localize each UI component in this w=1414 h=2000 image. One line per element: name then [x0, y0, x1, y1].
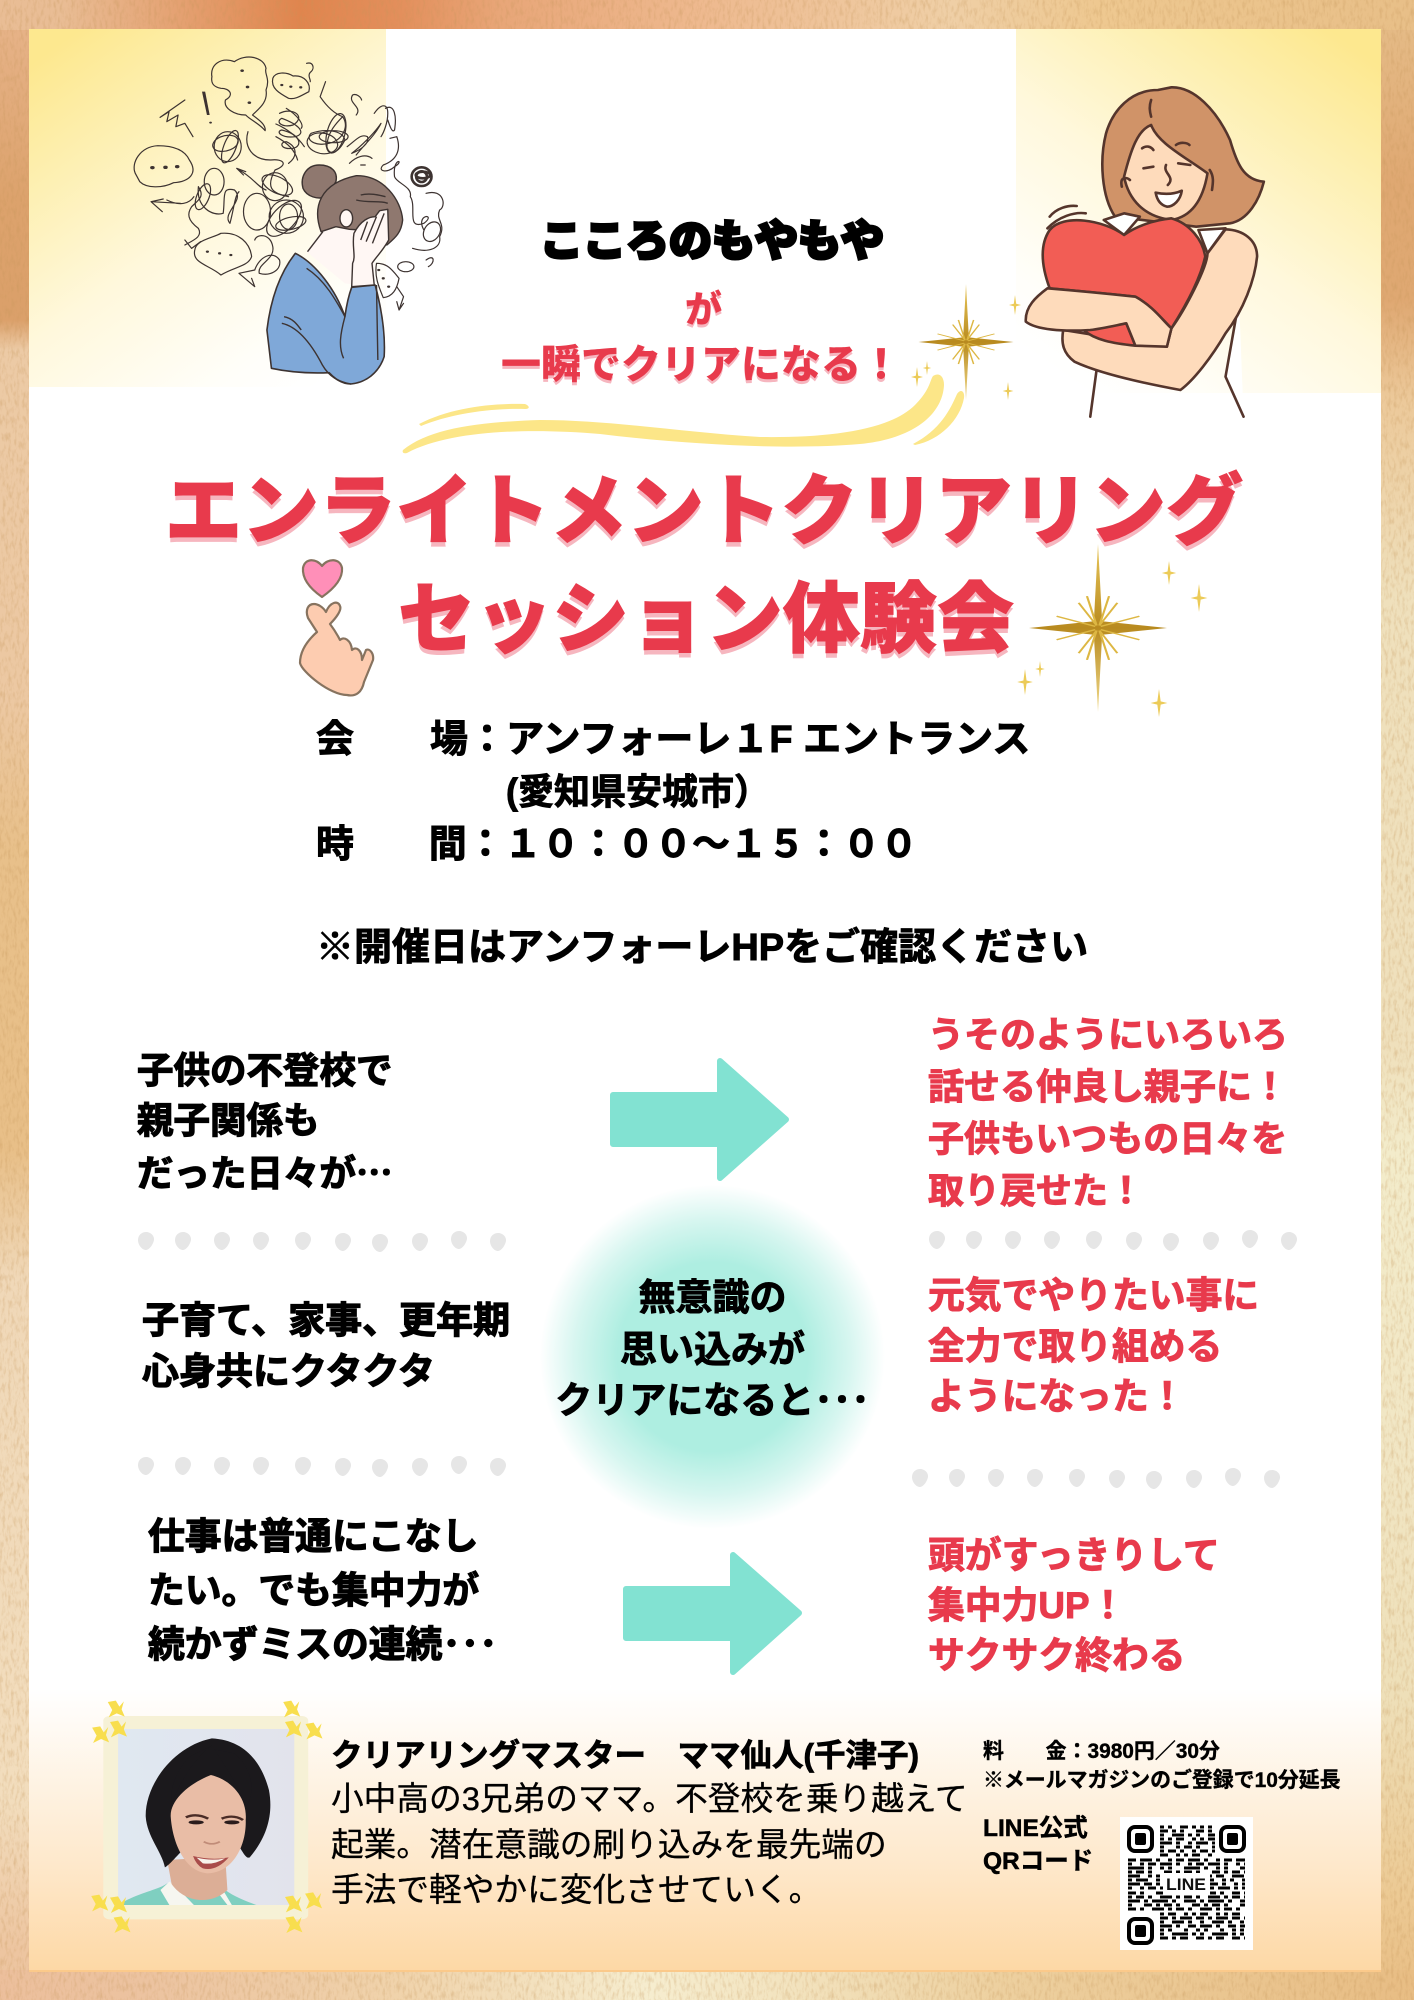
glowing circle with message — [540, 1185, 885, 1529]
subtitle: kokoro no moyamoya: こころのもやもや — [540, 218, 884, 266]
title line 1: エンライトメントクリアリング — [165, 469, 1243, 555]
profile heading: クリアリングマスター ママ仙人(千津子) — [331, 1737, 919, 1773]
QR code: LINE — [1166, 1875, 1206, 1894]
title line 2: セッション体験会 — [398, 577, 1014, 663]
after: focus up: 頭がすっきりして 集中力UP！ サクサク終わる — [928, 1535, 1220, 1676]
yellow corner top right — [1016, 29, 1381, 393]
subtitle: ga: が — [685, 289, 722, 330]
LINE label: LINE公式 QRコード — [983, 1815, 1093, 1875]
profile photo with frame — [91, 1700, 322, 1933]
after: energetic: 元気でやりたい事に 全力で取り組める ようになった！ — [928, 1275, 1259, 1417]
event details: venue: 会 場：アンフォーレ１F エントランス — [316, 719, 1030, 761]
before: busy parenting: 子育て、家事、更年期 心身共にクタクタ — [142, 1300, 510, 1392]
subtitle: clears in an instant: 一瞬でクリアになる！ — [501, 343, 901, 387]
before: work mistakes: 仕事は普通にこなし たい。でも集中力が 続かずミスの連続･･･ — [148, 1516, 498, 1665]
after: talkative parent and child: うそのようにいろいろ 話せる仲良し親子に！ 子供もいつもの日々を 取り戻せた！ — [928, 1014, 1288, 1211]
sparkle near title — [1029, 544, 1167, 712]
circle text: 無意識の 思い込みが クリアになると･･･ — [555, 1277, 870, 1421]
event details: city: (愛知県安城市） — [506, 771, 770, 812]
mail magazine note: ※メールマガジンのご登録で10分延長 — [983, 1769, 1340, 1792]
icon: finger heart — [300, 560, 373, 695]
profile description: 小中高の3兄弟のママ。不登校を乗り越えて 起業。潜在意識の刷り込みを最先端の 手法で軽やかに変化させていく。 — [331, 1780, 968, 1908]
note: check dates: ※開催日はアンフォーレHPをご確認ください — [316, 927, 1088, 969]
yellow corner top left — [29, 29, 386, 387]
swoosh — [403, 374, 964, 453]
event details: time: 時 間：１０：００～１５：００ — [316, 824, 918, 866]
before: school refusal: 子供の不登校で 親子関係も だった日々が… — [137, 1050, 392, 1197]
price: 料 金：3980円／30分 — [983, 1740, 1220, 1763]
illustration: smiling woman hugging heart — [1024, 86, 1266, 418]
sparkle near subtitle — [918, 284, 1014, 400]
illustration: worried woman with tangled thoughts — [134, 56, 444, 385]
QR code — [1120, 1817, 1253, 1950]
